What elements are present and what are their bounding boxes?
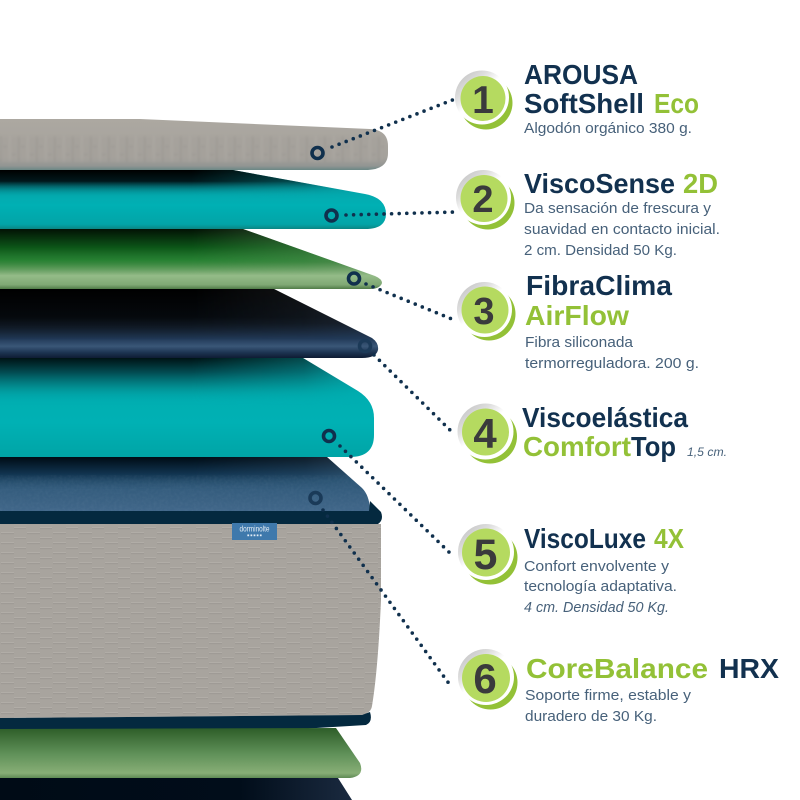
layer: blue core top (0, 457, 400, 512)
description 2 (524, 201, 720, 259)
connector 2 (326, 210, 456, 221)
connector 1 (312, 99, 455, 158)
item 5 (458, 523, 684, 616)
item 3 (457, 270, 699, 372)
description 1: Algodón orgánico 380 g. (524, 121, 692, 137)
connector 6 (310, 492, 450, 685)
badge 5 (458, 524, 518, 584)
heading 6: CoreBalance (526, 653, 708, 684)
badge 6 (458, 649, 518, 710)
connector 4 (360, 340, 450, 430)
description 5: tecnología adaptativa. (524, 579, 677, 595)
heading 3: FibraClima (526, 270, 672, 301)
piping: upper dark band (0, 501, 382, 524)
description 5 (524, 559, 677, 616)
connector 3 (348, 273, 453, 320)
heading 4: Comfort (523, 431, 631, 462)
heading 2: 2D (683, 168, 718, 199)
label: brand tag (232, 523, 277, 540)
heading 6: HRX (719, 653, 779, 684)
mattress illustration (0, 119, 400, 800)
badge 1 (455, 70, 512, 130)
description 3: termorreguladora. 200 g. (525, 356, 699, 372)
heading 4: Viscoelástica (522, 402, 688, 433)
description 2: 2 cm. Densidad 50 Kg. (524, 243, 677, 259)
label: brand tag: ▪▪▪▪▪ (247, 532, 263, 540)
description 2: Da sensación de frescura y (524, 201, 712, 217)
heading 1 (524, 59, 699, 119)
badge 3: 3 (473, 291, 495, 333)
heading 6 (526, 653, 779, 684)
description 6: Soporte firme, estable y (525, 688, 692, 704)
layer: teal viscoluxe (0, 358, 400, 457)
layer: bottom green (0, 728, 361, 778)
piping: lower dark band (0, 712, 371, 730)
badge 2: 2 (472, 179, 494, 221)
layer: teal visco (0, 170, 400, 229)
description 6 (525, 688, 692, 725)
heading 3: AirFlow (525, 300, 629, 331)
heading 3 (525, 270, 672, 331)
description 3: Fibra siliconada (525, 335, 634, 351)
badge 4 (458, 404, 517, 464)
description 5: 4 cm. Densidad 50 Kg. (524, 600, 669, 616)
note 4: 1,5 cm. (687, 445, 727, 459)
heading 5: 4X (654, 523, 684, 554)
description 3 (525, 335, 699, 372)
description 6: duradero de 30 Kg. (525, 709, 657, 725)
badge 5: 5 (474, 531, 497, 579)
badge 4: 4 (473, 410, 497, 457)
badge 6: 6 (473, 655, 497, 702)
layer: navy comfort (0, 289, 400, 358)
badge 1: 1 (472, 79, 494, 122)
item 2 (456, 168, 720, 259)
badge 3 (457, 282, 516, 340)
description 5: Confort envolvente y (524, 559, 670, 575)
heading 1: Eco (654, 88, 699, 119)
layer: green fibre (0, 229, 400, 289)
description 2: suavidad en contacto inicial. (524, 222, 720, 238)
heading 1: AROUSA (524, 59, 638, 90)
connector 5 (324, 430, 452, 555)
item 1 (455, 59, 699, 137)
heading 2: ViscoSense (524, 168, 675, 199)
item 6 (458, 649, 779, 725)
heading 1: SoftShell (524, 88, 644, 119)
layer: bottom navy (0, 778, 352, 800)
heading 4: Top (631, 431, 676, 462)
heading 5: ViscoLuxe (524, 523, 646, 554)
item 4 (458, 402, 727, 464)
layer: grey cover top (0, 119, 388, 170)
heading 4 (522, 402, 688, 462)
badge 2 (456, 170, 514, 230)
label: brand tag: dorminolte (240, 524, 270, 534)
block: grey knit side (0, 524, 381, 718)
